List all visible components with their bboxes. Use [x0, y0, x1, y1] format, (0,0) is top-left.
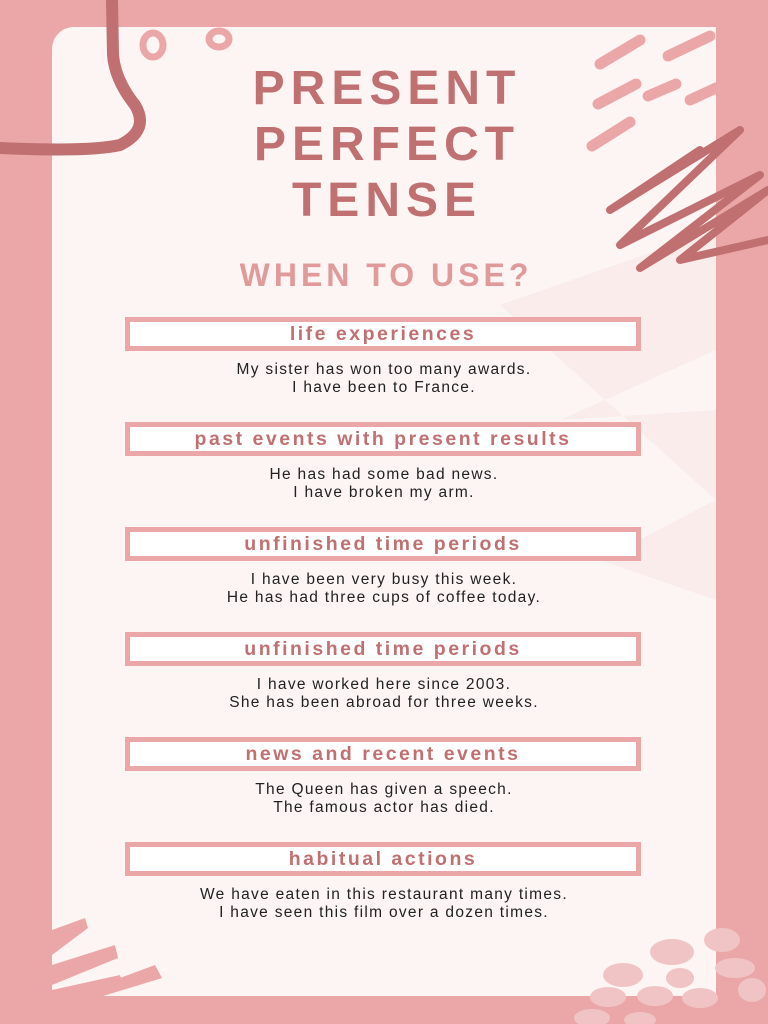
example text 2: He has had some bad news.	[270, 466, 498, 483]
example text 5: The Queen has given a speech.	[255, 781, 513, 798]
example text 4	[229, 676, 539, 711]
section: unfinished 2: unfinished time periods	[244, 638, 522, 660]
section: life experiences	[125, 317, 641, 351]
section: news	[125, 737, 641, 771]
section: news: news and recent events	[245, 743, 520, 765]
title	[253, 62, 521, 227]
icon: faint brush strokes	[500, 230, 716, 600]
section: habitual	[125, 842, 641, 876]
example text 3	[227, 571, 541, 606]
example text 1: I have been to France.	[292, 379, 476, 396]
example text 3: He has had three cups of coffee today.	[227, 589, 541, 606]
example text 2	[270, 466, 498, 501]
example text 4: She has been abroad for three weeks.	[229, 694, 539, 711]
icon: dashes top right	[592, 36, 716, 146]
example text 1	[237, 361, 531, 396]
section: life experiences: life experiences	[290, 323, 476, 345]
section: habitual: habitual actions	[289, 848, 477, 870]
icon: hook line	[0, 0, 140, 149]
section: unfinished 2	[125, 632, 641, 666]
icon: small rings	[143, 31, 229, 57]
section: unfinished 1	[125, 527, 641, 561]
title: PRESENT	[253, 62, 521, 115]
subtitle: WHEN TO USE?	[240, 257, 532, 293]
icon: scribble	[610, 130, 768, 268]
section: unfinished 1: unfinished time periods	[244, 533, 522, 555]
icon: leaf shapes bottom left	[52, 918, 162, 1000]
example text 5: The famous actor has died.	[273, 799, 495, 816]
title: PERFECT	[254, 118, 520, 171]
section: past events	[125, 422, 641, 456]
example text 4: I have worked here since 2003.	[257, 676, 511, 693]
example text 2: I have broken my arm.	[293, 484, 475, 501]
example text 6	[200, 886, 568, 921]
title: TENSE	[292, 174, 482, 227]
icon: dots bottom right	[574, 928, 766, 1024]
example text 1: My sister has won too many awards.	[237, 361, 531, 378]
example text 3: I have been very busy this week.	[251, 571, 517, 588]
example text 6: I have seen this film over a dozen times.	[219, 904, 549, 921]
example text 6: We have eaten in this restaurant many times.	[200, 886, 568, 903]
example text 5	[255, 781, 513, 816]
section: past events: past events with present results	[195, 428, 571, 450]
